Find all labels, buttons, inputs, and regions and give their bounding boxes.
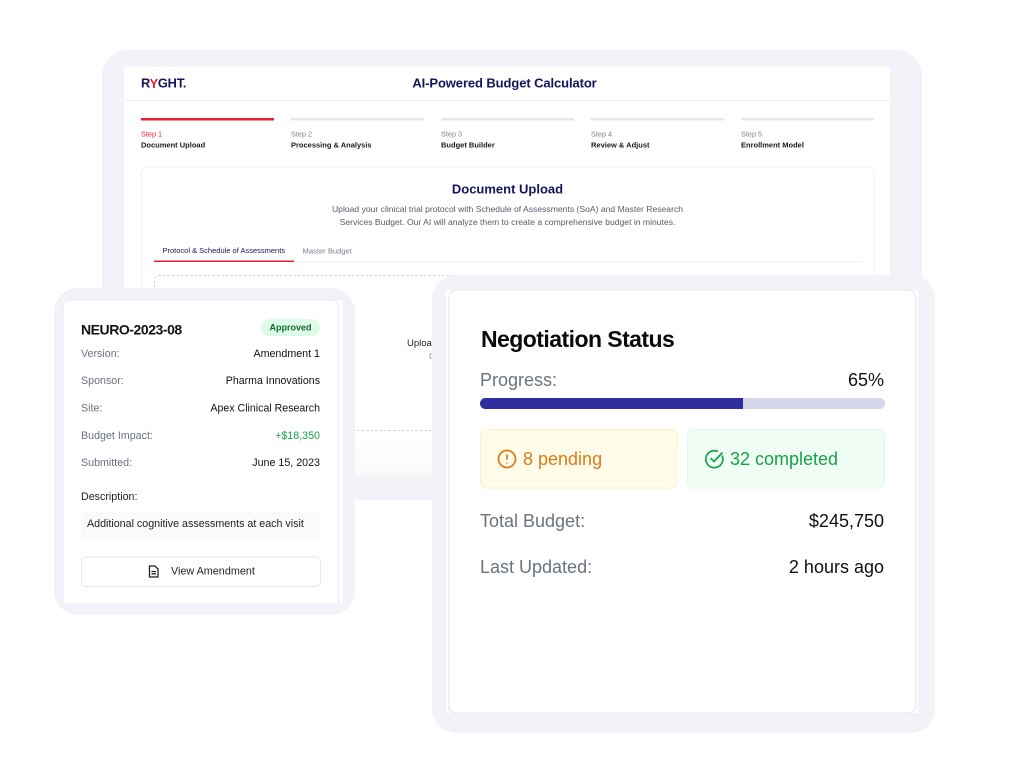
amendment id: NEURO-2023-08 [81,322,182,338]
amendment details: Site: [81,402,102,414]
last updated: Last Updated: [480,557,592,577]
amendment details: Apex Clinical Research [210,402,320,414]
amendment details [81,348,320,469]
stepper: Step 2 [291,130,312,138]
heading: document upload: Document Upload [452,182,563,196]
stepper: Document Upload [141,140,206,150]
description: Additional cognitive assessments at each visit [87,518,304,530]
upload description: Upload your clinical trial protocol with Schedule of Assessments (SoA) and Master Research [332,204,683,214]
stepper: Budget Builder [441,140,495,150]
stepper: Step 4 [591,130,612,138]
amendment details: Sponsor: [81,375,124,387]
amendment details: Submitted: [81,457,132,469]
completed count: 32 completed [730,449,838,469]
total budget: $245,750 [809,511,884,531]
total budget: Total Budget: [480,511,585,531]
tabs: Protocol & Schedule of Assessments [162,246,285,255]
upload dropzone: Drag and drop [429,352,477,360]
tabs [154,246,861,262]
panel: amendment card [54,288,355,615]
view amendment button: View Amendment [171,566,255,578]
amendment details: Budget Impact: [81,430,153,442]
amendment details: Pharma Innovations [226,375,320,387]
logo: RYGHT. [141,76,186,90]
heading: negotiation status: Negotiation Status [481,326,674,352]
amendment details: June 15, 2023 [252,457,320,469]
progress: Progress: [480,370,557,390]
panel: negotiation status card [432,275,935,733]
total budget [480,511,884,531]
panel: budget calculator window [102,50,922,500]
description: Description: [81,491,137,503]
tabs: Master Budget [302,246,353,256]
last updated: 2 hours ago [789,557,884,577]
progress: 65% [848,370,884,390]
stepper: Review & Adjust [591,140,650,150]
pending count [480,430,677,488]
upload description: Services Budget. Our AI will analyze them to create a comprehensive budget in minutes. [340,217,675,227]
stepper: Enrollment Model [741,140,804,150]
view amendment button [82,557,320,586]
progress [480,370,885,409]
status badge [261,319,320,336]
icon: check circle [706,451,723,468]
upload dropzone: Upload Protocol Document [407,338,521,349]
pending count: 8 pending [523,449,602,469]
icon: document [150,566,158,577]
amendment details: +$18,350 [275,430,320,442]
amendment details: Version: [81,348,120,360]
stepper [141,118,874,150]
stepper: Processing & Analysis [291,140,372,150]
heading: calculator title: AI-Powered Budget Calculator [412,76,597,90]
upload dropzone [154,276,860,430]
stepper: Step 3 [441,130,462,138]
upload description [332,204,683,227]
completed count [688,430,884,488]
amendment details: Amendment 1 [253,348,320,360]
stepper: Step 5 [741,130,762,138]
panel: document upload card [142,167,874,478]
status badge: Approved [269,322,312,332]
description [81,491,320,538]
stepper: Step 1 [141,130,162,138]
icon: alert [498,450,516,468]
last updated [480,557,884,577]
